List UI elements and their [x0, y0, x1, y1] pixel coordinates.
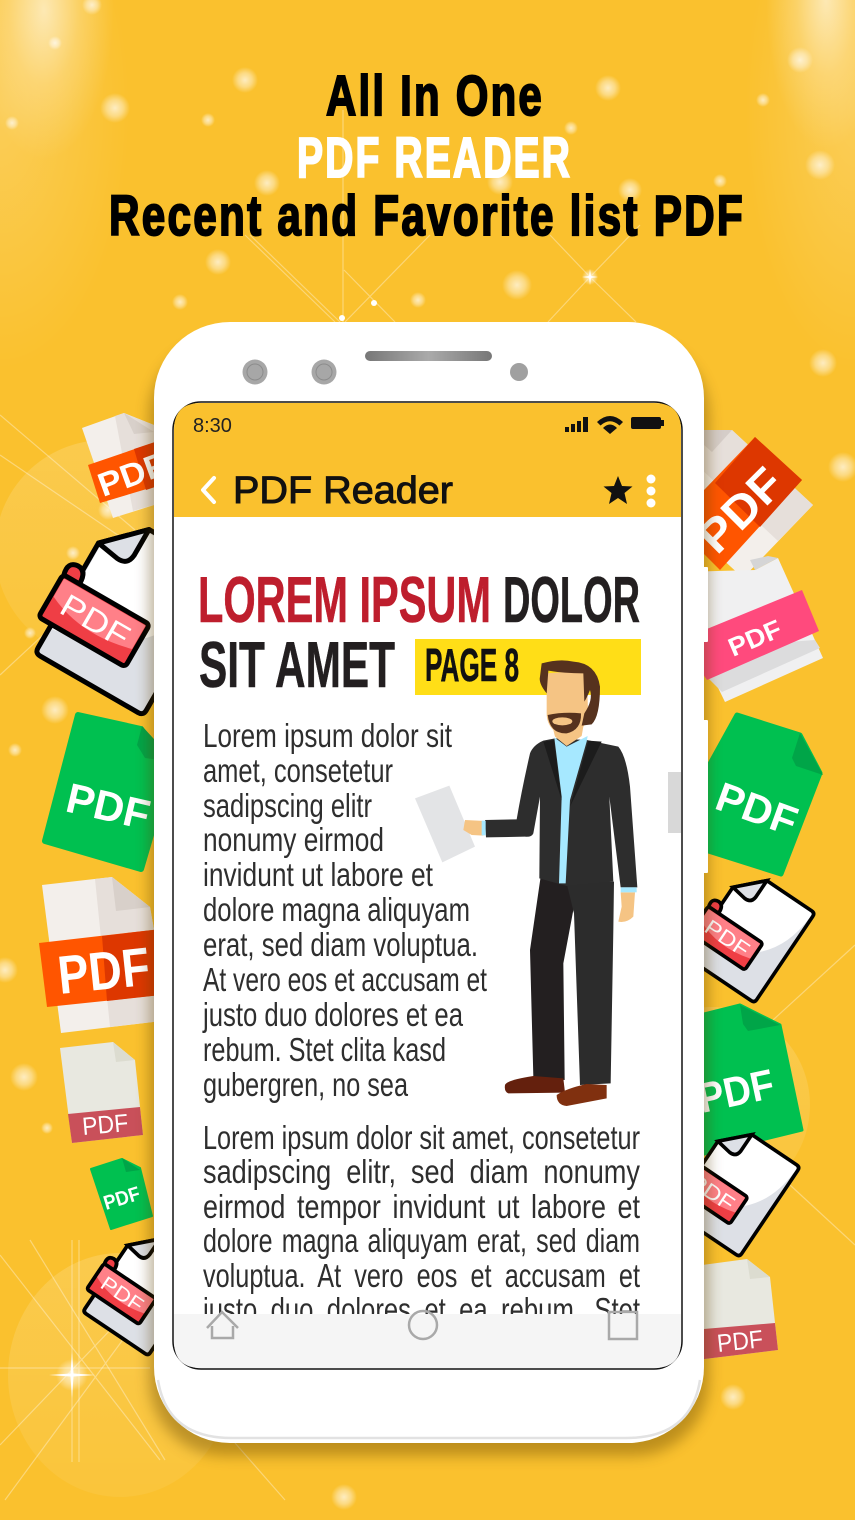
title: PDF READER — [297, 126, 572, 190]
page badge: PAGE 8 — [425, 639, 519, 691]
paragraph one: nonumy eirmod — [203, 821, 384, 858]
icon: green pdf right — [680, 715, 823, 874]
headline: SIT AMET — [199, 628, 395, 701]
paragraph two — [202, 1119, 640, 1328]
icon: green pdf lower right — [680, 1005, 802, 1160]
page badge — [415, 639, 641, 695]
back arrow — [203, 478, 214, 502]
paragraph one: invidunt ut labore et — [203, 856, 433, 893]
icon: black outline pdf right: PDF — [700, 916, 754, 962]
icon: black outline pdf lower right: PDF — [685, 1170, 739, 1216]
paragraph two: sadipscing elitr, sed diam nonumy — [203, 1153, 640, 1190]
icon: circle — [409, 1311, 437, 1339]
icon: light pdf left: PDF — [81, 1109, 129, 1141]
paragraph one: amet, consetetur — [203, 752, 393, 789]
illustration: businessman — [415, 660, 637, 1106]
status time: 8:30 — [193, 415, 232, 437]
icon: square — [609, 1312, 637, 1339]
menu dots — [646, 474, 656, 508]
status icons — [565, 416, 664, 434]
side buttons — [700, 567, 708, 873]
headline: LOREM IPSUM — [198, 563, 491, 636]
icon: light pdf left — [60, 1042, 143, 1143]
icon: green pdf left — [45, 715, 175, 869]
phone — [149, 322, 709, 1456]
paragraph one: justo duo dolores et ea — [202, 996, 463, 1033]
scroll handle — [668, 772, 681, 833]
bottom navigation bar — [174, 1311, 681, 1368]
paragraph two: dolore magna aliquyam erat, sed diam — [203, 1222, 640, 1259]
phone body — [154, 322, 704, 1443]
paragraph one: sadipscing elitr — [203, 787, 372, 824]
app header — [174, 403, 681, 517]
icon: orange pdf top left — [82, 413, 171, 518]
paragraph one: Lorem ipsum dolor sit — [203, 717, 452, 754]
paragraph two: eirmod tempor invidunt ut labore et — [203, 1188, 640, 1225]
icon: light pdf right: PDF — [716, 1325, 764, 1358]
icon: orange pdf right: PDF — [687, 457, 793, 563]
screen — [173, 402, 682, 1369]
icon: small green pdf left: PDF — [101, 1183, 143, 1215]
paragraph two: voluptua. At vero eos et accusam et — [203, 1257, 640, 1294]
paragraph two: Lorem ipsum dolor sit amet, consetetur — [203, 1119, 640, 1156]
title — [109, 64, 745, 248]
icon: black outline pdf bottom left — [75, 1221, 206, 1356]
app title: PDF Reader — [233, 470, 453, 512]
icon: black outline pdf lower right — [663, 1115, 800, 1257]
icon: black outline pdf right — [678, 861, 815, 1003]
icon: pink pdf right — [680, 556, 823, 702]
icon: light pdf right — [680, 1259, 778, 1362]
paragraph one: rebum. Stet clita kasd — [203, 1031, 446, 1068]
icon: black outline pdf bottom left: PDF — [96, 1273, 147, 1317]
icon: orange pdf left large — [39, 877, 170, 1033]
icon: green pdf right: PDF — [710, 773, 804, 845]
icon: black outline pdf left — [22, 504, 225, 716]
paragraph one: At vero eos et accusam et — [203, 961, 487, 998]
sparkles — [49, 269, 598, 1398]
paragraph one: erat, sed diam voluptua. — [203, 926, 478, 963]
title: All In One — [326, 64, 544, 128]
icon: orange pdf top left: PDF — [93, 445, 171, 504]
icon: green pdf left: PDF — [62, 774, 154, 839]
icon: home — [207, 1312, 238, 1338]
paragraph two: justo duo dolores et ea rebum. Stet — [202, 1291, 640, 1328]
paragraph one: gubergren, no sea — [203, 1066, 408, 1103]
icon: small green pdf left — [91, 1158, 152, 1229]
headline: DOLOR — [503, 563, 640, 636]
icon: orange pdf left large: PDF — [55, 937, 153, 1006]
cameras and speaker — [242, 351, 528, 384]
headline — [198, 563, 640, 701]
star icon — [604, 476, 632, 504]
phone shadow — [149, 340, 709, 1456]
icon: pink pdf right: PDF — [724, 613, 786, 663]
paragraph one — [202, 717, 487, 1103]
icon: green pdf lower right: PDF — [694, 1060, 778, 1122]
icon: black outline pdf left: PDF — [54, 587, 136, 655]
paragraph one: dolore magna aliquyam — [203, 891, 470, 928]
icon: orange pdf right — [680, 430, 813, 578]
